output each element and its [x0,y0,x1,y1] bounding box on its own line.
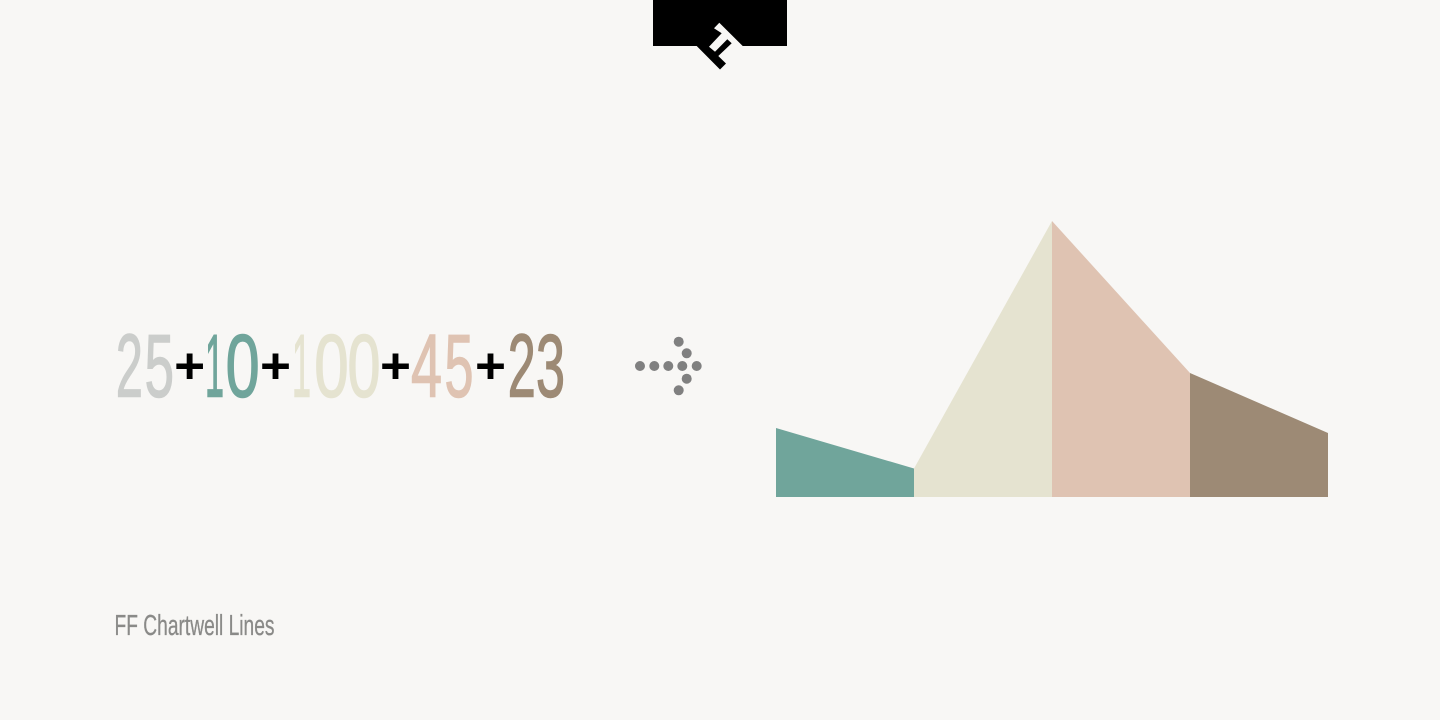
number 100: 1 [292,316,311,416]
segment: teal [776,428,914,497]
segment: pink [1052,221,1190,497]
number 100: 0 [314,316,349,416]
icon: dotted arrow [635,337,702,395]
plus sign: + [174,338,205,394]
logo: black tab with F mark [653,0,787,70]
number 45: 4 [411,316,442,416]
number 100 [292,316,380,416]
number 23: 3 [536,316,565,416]
segment: beige [914,221,1052,497]
plus sign: + [380,338,411,394]
number 25: 2 [116,316,143,416]
number 10: 1 [205,316,224,416]
number 45: 5 [444,316,474,416]
number 10: 0 [226,316,260,416]
number 23: 2 [508,316,536,416]
segment: brown [1190,373,1328,497]
equation: sum of numbers [116,316,565,416]
plus sign: + [475,338,506,394]
plus sign: + [260,338,291,394]
number 100: 0 [348,316,380,416]
number 25: 5 [145,316,174,416]
caption: FF Chartwell Lines [114,610,274,642]
chart: area segments [776,221,1328,497]
